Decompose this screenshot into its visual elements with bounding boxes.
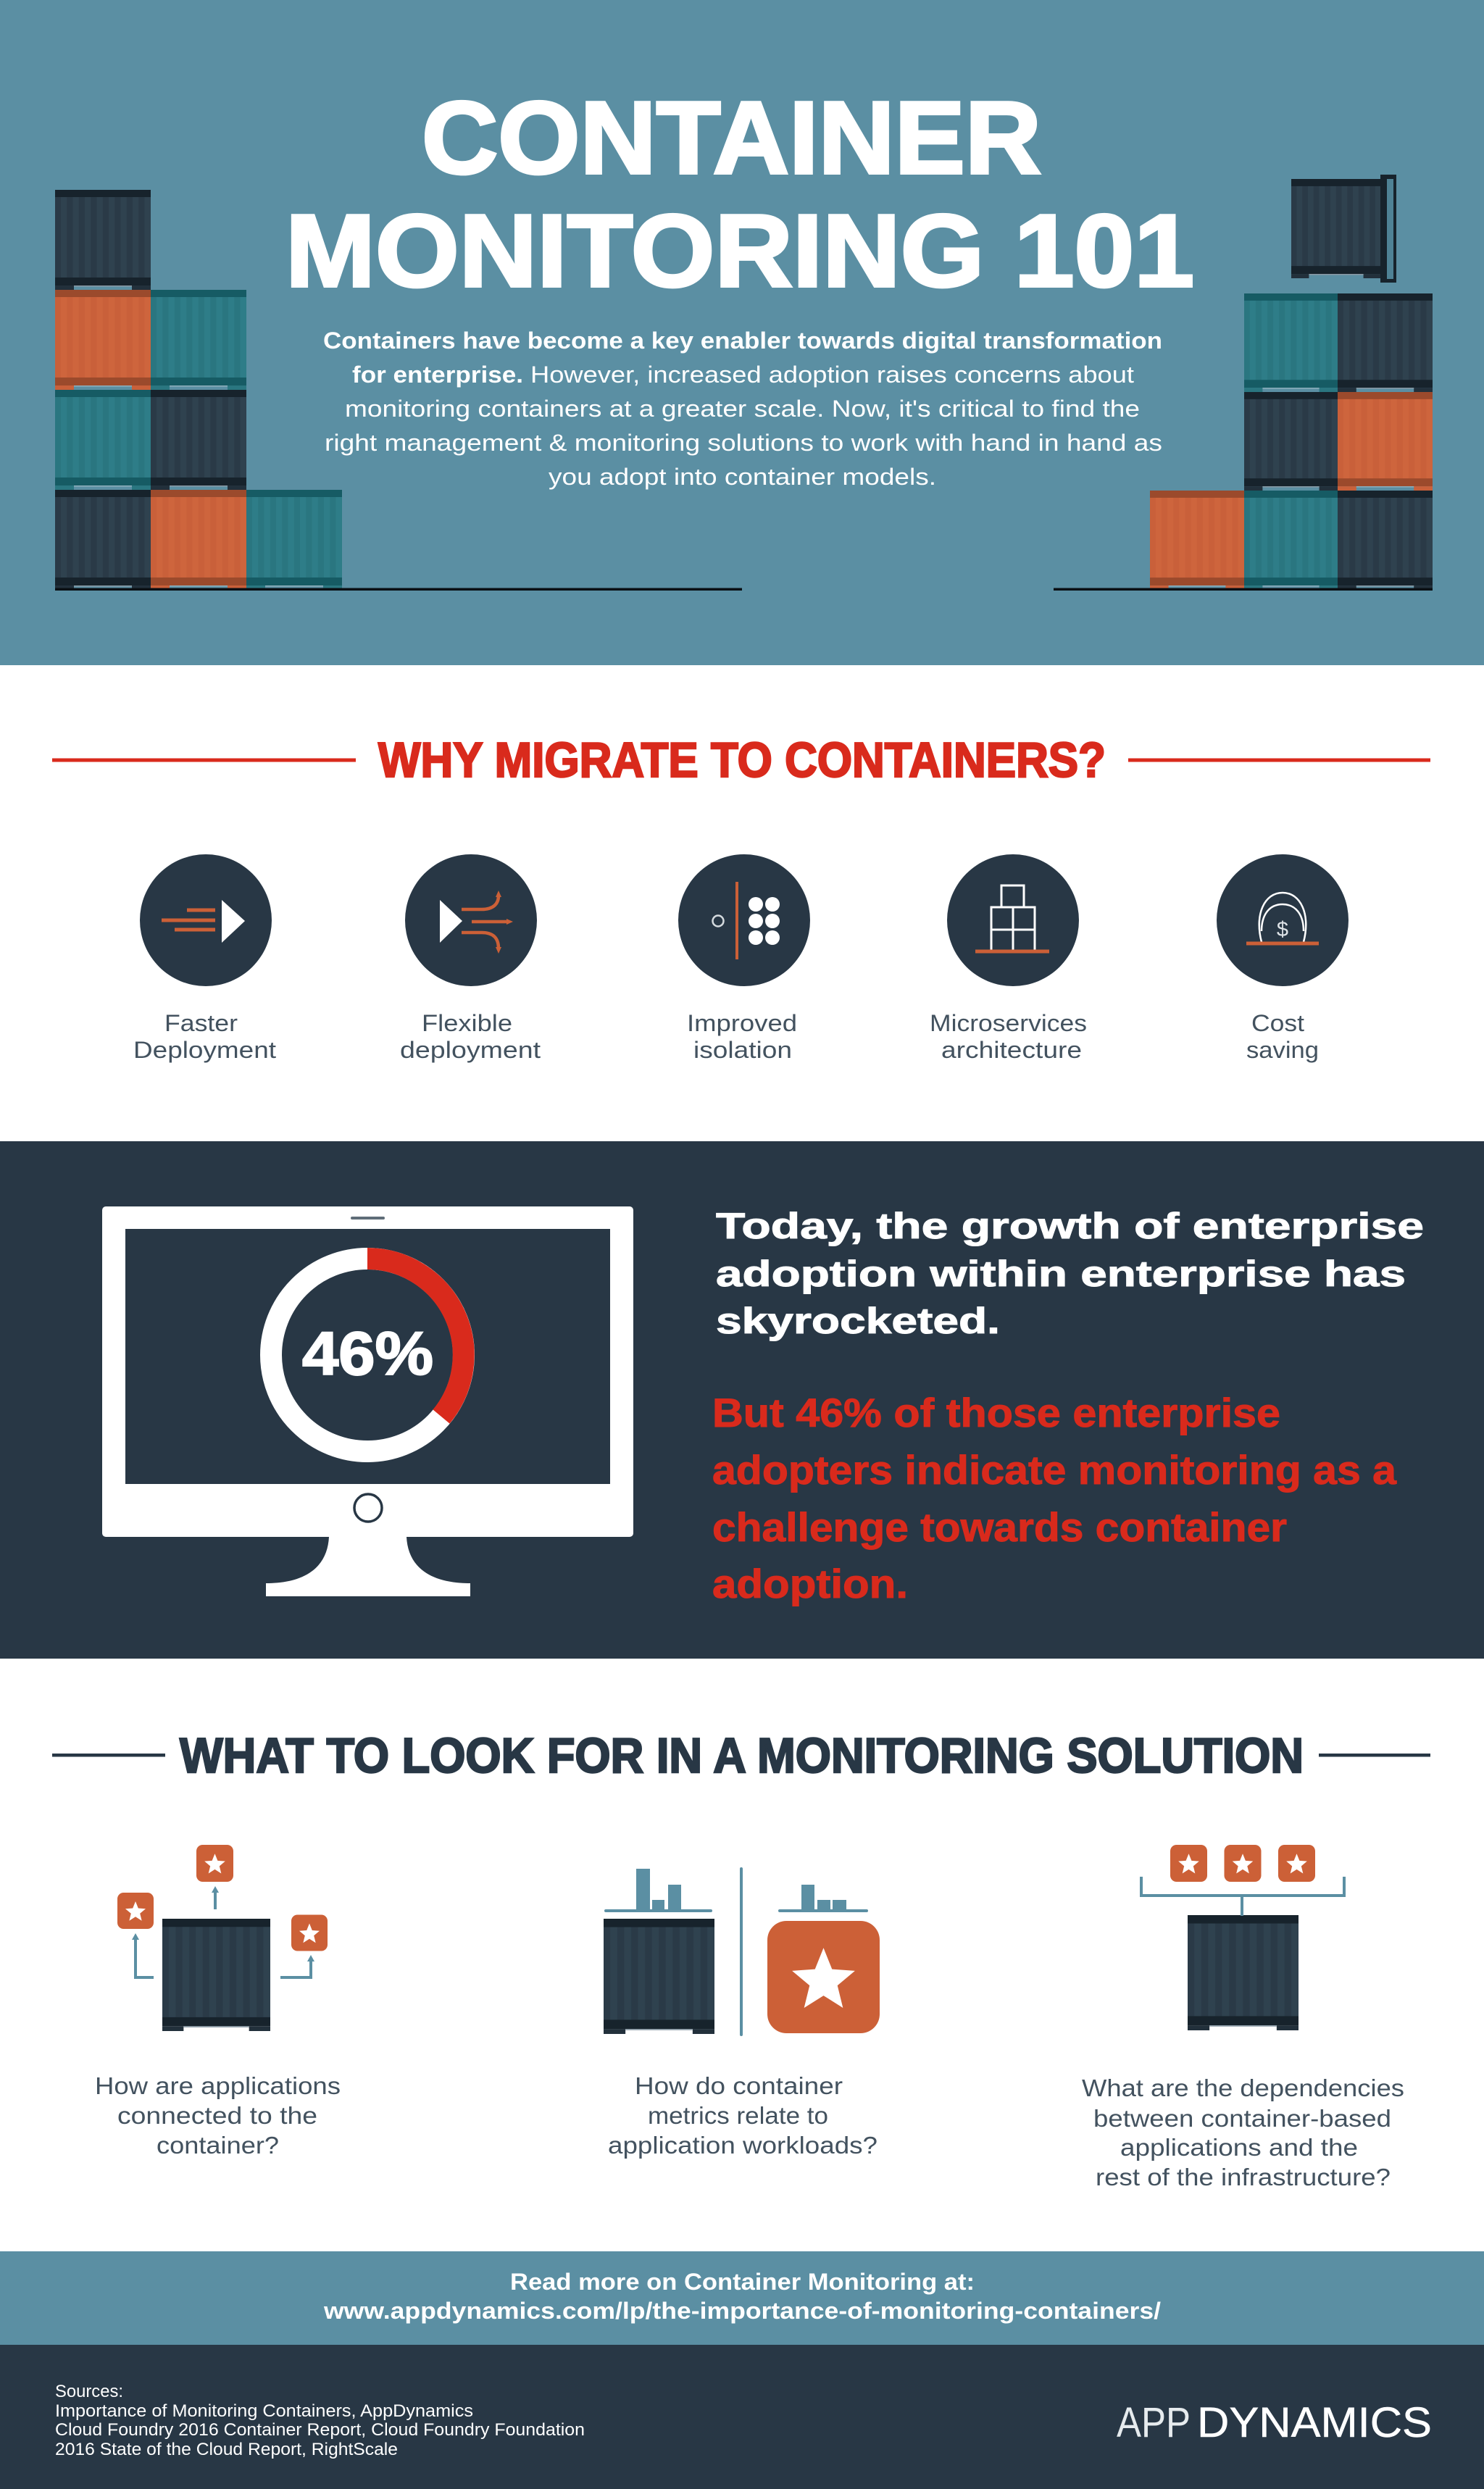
panel: enterprise adoption statistic <box>0 1141 1484 1659</box>
panel: footer <box>0 2345 1484 2489</box>
donut chart <box>271 1259 464 1451</box>
intro paragraph <box>323 328 1162 490</box>
icon: cost saving: $ <box>1277 918 1288 941</box>
icon: monitor with 46% donut chart <box>102 1206 633 1596</box>
text: monitoring challenge callout: challenge towards container <box>712 1504 1287 1550</box>
text: sources: 2016 State of the Cloud Report, RightScale <box>55 2440 398 2459</box>
label: faster deployment <box>133 1010 276 1063</box>
icon: microservices architecture <box>947 854 1079 986</box>
text: read more link <box>323 2269 1161 2324</box>
text: sources <box>55 2382 585 2459</box>
icon: flexible deployment <box>405 854 537 986</box>
label: flexible deployment: deployment <box>400 1037 541 1063</box>
label: microservices architecture: architecture <box>941 1037 1082 1063</box>
text: read more link: Read more on Container Monitoring at: <box>510 2269 975 2295</box>
text: monitoring challenge callout <box>712 1390 1397 1606</box>
question: metrics <box>608 2072 878 2159</box>
text: sources: Sources: <box>55 2382 123 2401</box>
panel: header <box>0 0 1484 665</box>
label: improved isolation: isolation <box>693 1037 792 1063</box>
text: growth statement: adoption within enterprise has <box>716 1254 1406 1294</box>
label: flexible deployment: Flexible <box>422 1010 512 1036</box>
panel: what to look for <box>52 1728 1430 2190</box>
question: applications: container? <box>157 2132 279 2159</box>
bars: workload metrics <box>778 1885 868 1912</box>
question: dependencies: applications and the <box>1120 2134 1358 2161</box>
text: sources: Importance of Monitoring Containers, AppDynamics <box>55 2401 473 2421</box>
text: growth statement: Today, the growth of enterprise <box>716 1206 1424 1246</box>
question: dependencies: What are the dependencies <box>1082 2075 1404 2101</box>
label: improved isolation: Improved <box>687 1010 797 1036</box>
question: applications: How are applications <box>95 2072 341 2099</box>
text: growth statement: skyrocketed. <box>716 1301 1000 1341</box>
label: faster deployment: Deployment <box>133 1037 276 1063</box>
text: monitoring challenge callout: adopters indicate monitoring as a <box>712 1447 1397 1493</box>
label: flexible deployment <box>400 1010 541 1063</box>
question: dependencies: between container-based <box>1093 2105 1391 2132</box>
label: cost saving <box>1246 1010 1319 1063</box>
intro paragraph: for enterprise. <box>352 362 523 388</box>
question: dependencies <box>1082 2075 1404 2190</box>
value: 46%: 46% <box>302 1319 433 1388</box>
label: improved isolation <box>687 1010 797 1063</box>
logo: AppDynamics: APP <box>1117 2399 1191 2446</box>
label: cost saving: Cost <box>1251 1010 1304 1036</box>
floating container with open door <box>1291 175 1396 283</box>
title: MONITORING 101 <box>285 193 1194 309</box>
label: microservices architecture <box>930 1010 1087 1063</box>
heading: what to look for in a monitoring solution: WHAT TO LOOK FOR IN A MONITORING SOLUTION <box>180 1728 1304 1783</box>
panel: why migrate <box>52 733 1430 1063</box>
icon: cost saving <box>1217 854 1348 986</box>
panel: read more banner <box>0 2251 1484 2345</box>
icon: faster deployment <box>140 854 272 986</box>
text: growth statement <box>716 1206 1424 1341</box>
question: applications: connected to the <box>117 2102 317 2129</box>
text: read more link: www.appdynamics.com/lp/the-importance-of-monitoring-containers/ <box>323 2298 1161 2324</box>
icon: applications connected to container <box>117 1845 328 2031</box>
logo: AppDynamics: DYNAMICS <box>1197 2399 1432 2446</box>
intro paragraph: monitoring containers at a greater scale. Now, it's critical to find the <box>345 396 1140 422</box>
label: microservices architecture: Microservices <box>930 1010 1087 1036</box>
question: dependencies: rest of the infrastructure? <box>1096 2164 1391 2190</box>
label: faster deployment: Faster <box>164 1010 238 1036</box>
left container stack <box>55 190 742 591</box>
intro paragraph: right management & monitoring solutions to work with hand in hand as <box>325 430 1162 456</box>
icon: improved isolation <box>678 854 810 986</box>
right container stack <box>1054 293 1433 591</box>
intro paragraph: you adopt into container models. <box>549 464 936 490</box>
icon: container dependencies <box>1141 1845 1344 2030</box>
text: monitoring challenge callout: adoption. <box>712 1561 908 1606</box>
heading: why migrate to containers: WHY MIGRATE TO CONTAINERS? <box>378 733 1106 788</box>
question: metrics: application workloads? <box>608 2132 878 2159</box>
question: metrics: How do container <box>635 2072 843 2099</box>
heading: why migrate to containers <box>52 733 1430 788</box>
bars: container metrics <box>604 1869 712 1912</box>
intro paragraph: Containers have become a key enabler towards digital transformation <box>323 328 1162 354</box>
title <box>285 80 1194 309</box>
question: applications <box>95 2072 341 2159</box>
icon: container metrics versus workloads <box>604 1867 880 2036</box>
question: metrics: metrics relate to <box>648 2102 828 2129</box>
title: CONTAINER <box>422 80 1041 196</box>
text: sources: Cloud Foundry 2016 Container Report, Cloud Foundry Foundation <box>55 2420 585 2440</box>
intro paragraph: However, increased adoption raises concerns about <box>530 362 1134 388</box>
text: monitoring challenge callout: But 46% of those enterprise <box>712 1390 1280 1435</box>
label: cost saving: saving <box>1246 1037 1319 1063</box>
